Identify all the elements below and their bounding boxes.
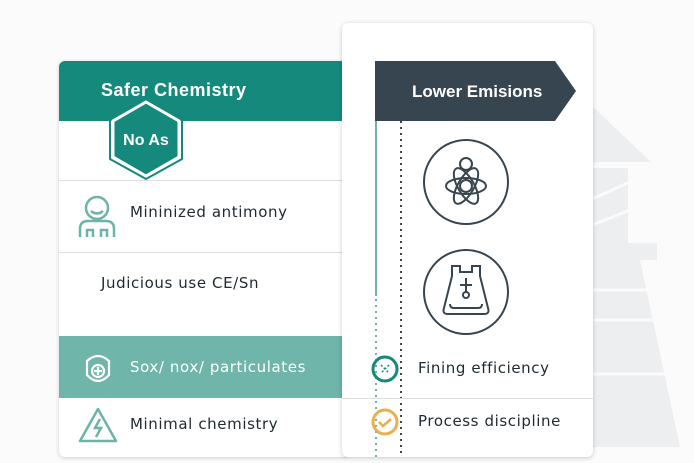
timeline lines xyxy=(375,121,402,457)
row: Mininized antimony xyxy=(78,196,288,237)
row: Sox/nox band xyxy=(59,336,349,398)
panel: lower emissions xyxy=(342,23,593,457)
icon: No As hexagon: No As xyxy=(123,132,169,149)
icon: warning xyxy=(78,408,118,442)
row: Mininized antimony: Mininized antimony xyxy=(130,203,288,221)
header: Safer Chemistry xyxy=(59,61,349,121)
header: Lower Emisions: Lower Emisions xyxy=(412,82,542,101)
header: Lower Emisions xyxy=(375,61,576,121)
header: Safer Chemistry: Safer Chemistry xyxy=(101,80,247,100)
row: Sox/nox band: Sox/ nox/ particulates xyxy=(130,358,306,376)
row: Judicious use: Judicious use CE/Sn xyxy=(101,274,259,292)
icon: No As hexagon xyxy=(109,100,183,180)
icon: person xyxy=(78,196,116,237)
row: Process discipline: Process discipline xyxy=(418,412,561,430)
icon: atom circle xyxy=(423,139,509,225)
row: Minimal chemistry xyxy=(78,408,278,442)
row: Fining efficiency xyxy=(372,356,550,382)
icon: flask circle xyxy=(423,249,509,335)
row: Minimal chemistry: Minimal chemistry xyxy=(130,415,278,433)
icon: shield xyxy=(86,354,110,382)
row: Process discipline xyxy=(372,408,561,436)
row: Fining efficiency: Fining efficiency xyxy=(418,359,550,377)
panel: safer chemistry xyxy=(59,61,349,457)
